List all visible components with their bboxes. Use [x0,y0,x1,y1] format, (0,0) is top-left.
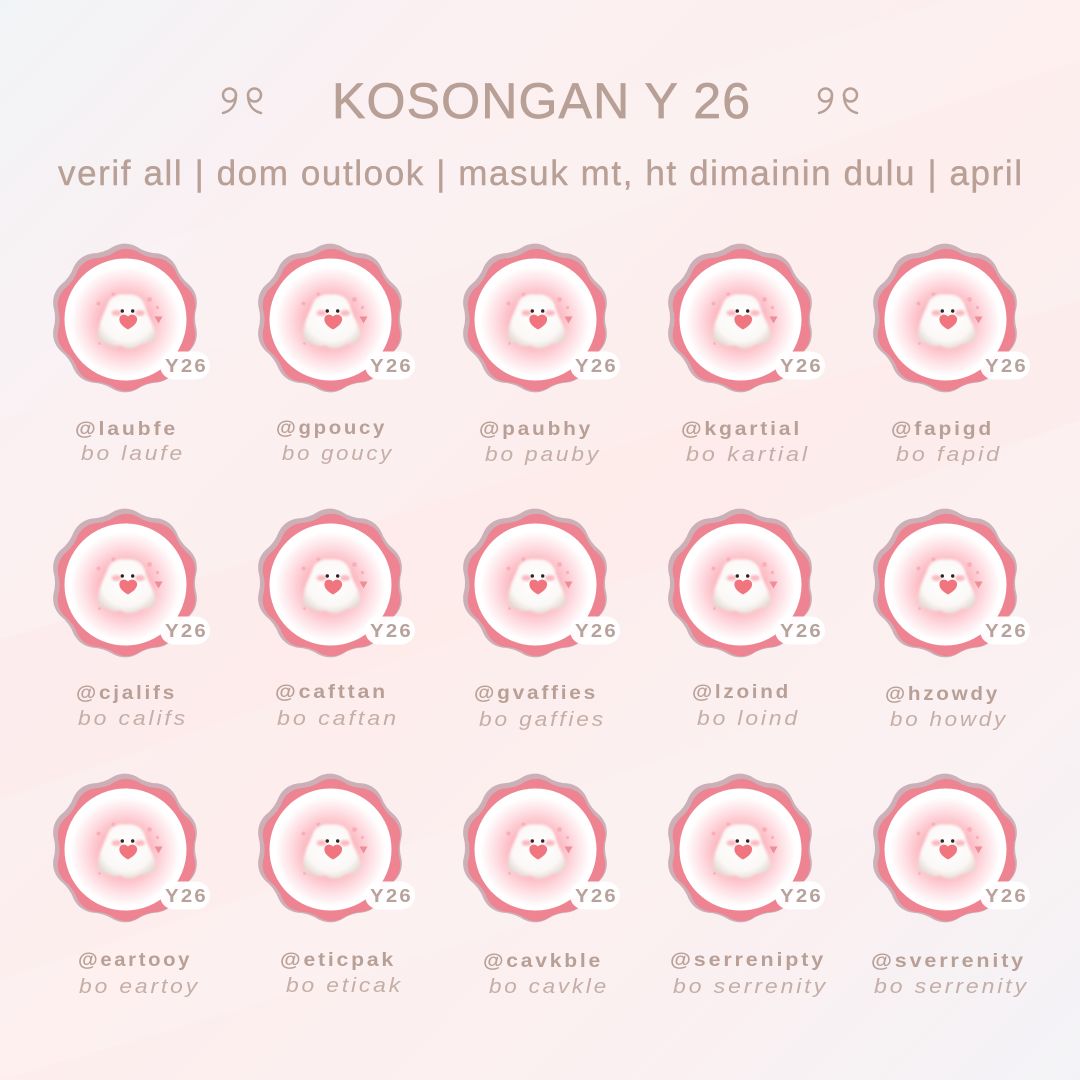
card: laubfe [41,234,210,465]
card: hzowdy [861,499,1030,731]
card: cafttan: bo caftan [277,708,399,730]
card: serrenipty: @serrenipty [670,950,826,971]
card: cjalifs [41,499,210,730]
card: cafttan: Y26 [370,621,413,641]
card: eartooy [41,764,210,998]
card: cavkble [451,764,620,998]
subtitle: verif all | dom outlook | masuk mt, ht dimainin dulu | april [58,154,1022,193]
card: paubhy [451,234,620,466]
card: cjalifs: @cjalifs [76,683,177,704]
card: gvaffies [451,499,620,731]
card: lzoind: bo loind [697,708,800,730]
card: kgartial: bo kartial [686,444,810,466]
card: serrenipty [656,764,828,998]
card: fapigd: bo fapid [896,444,1002,466]
card: eartooy: Y26 [165,886,208,906]
card: gpoucy: bo goucy [282,443,394,465]
title: KOSONGAN Y 26 [332,73,750,129]
card: cjalifs: Y26 [165,621,208,641]
card: lzoind: @lzoind [692,682,791,703]
card: hzowdy: @hzowdy [885,684,1000,705]
card: gvaffies: bo gaffies [479,709,606,731]
card: fapigd: Y26 [985,356,1028,376]
card: paubhy: Y26 [575,356,618,376]
card: paubhy: bo pauby [485,444,601,466]
icon: right ornament [819,88,857,113]
card: gpoucy: @gpoucy [276,418,387,439]
card: fapigd: @fapigd [891,419,994,440]
card: sverrenity: @sverrenity [871,951,1026,972]
card: serrenipty: bo serrenity [673,976,828,998]
card: serrenipty: Y26 [780,886,823,906]
card: cafttan [246,499,415,730]
card: gvaffies: @gvaffies [474,683,598,704]
card: lzoind: Y26 [780,621,823,641]
card: eticpak: @eticpak [280,950,396,971]
card: lzoind [656,499,825,730]
card: laubfe: @laubfe [75,419,178,440]
card: hzowdy: bo howdy [890,709,1008,731]
card: cafttan: @cafttan [275,682,388,703]
card: cavkble: Y26 [575,886,618,906]
card: eticpak [246,764,415,997]
card: eticpak: bo eticak [286,975,403,997]
card: kgartial: Y26 [780,356,823,376]
card: gvaffies: Y26 [575,621,618,641]
card: eartooy: bo eartoy [79,976,200,998]
card: cjalifs: bo califs [78,708,188,730]
card: cavkble: bo cavkle [489,976,609,998]
card: sverrenity [861,764,1030,998]
card: gpoucy [246,234,415,465]
card: sverrenity: Y26 [985,886,1028,906]
card: cavkble: @cavkble [483,951,603,972]
card: sverrenity: bo serrenity [874,976,1029,998]
card: paubhy: @paubhy [479,419,593,440]
card: eticpak: Y26 [370,886,413,906]
card: laubfe: Y26 [165,356,208,376]
icon: left ornament [223,88,261,113]
card: gpoucy: Y26 [370,356,413,376]
card: eartooy: @eartooy [78,950,192,971]
card: fapigd [861,234,1030,466]
card: hzowdy: Y26 [985,621,1028,641]
card: laubfe: bo laufe [81,443,185,465]
card: kgartial: @kgartial [681,419,802,440]
card: kgartial [656,234,825,466]
